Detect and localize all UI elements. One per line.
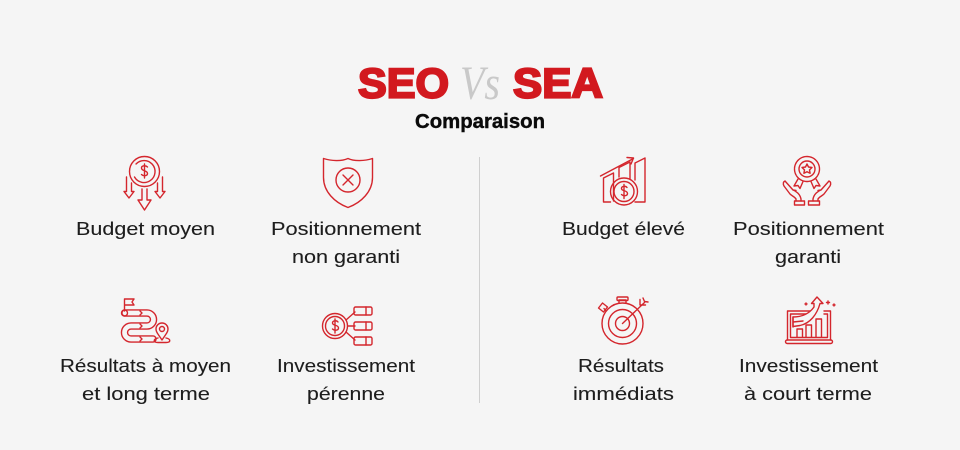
icon: shield with cross — [324, 158, 372, 208]
item: résultats immédiats — [573, 297, 674, 404]
title — [358, 57, 603, 110]
icon: hands with award — [783, 156, 831, 205]
label: Investissement — [277, 355, 415, 376]
item: positionnement non garanti: non garanti — [292, 246, 400, 267]
label: Budget moyen — [76, 218, 215, 239]
item: investissement pérenne — [277, 307, 415, 404]
subtitle: Comparaison — [415, 111, 545, 133]
label: Positionnement — [733, 218, 884, 239]
item: résultats à moyen et long terme — [60, 299, 231, 404]
item: résultats à moyen et long terme: et long terme — [82, 383, 210, 404]
item: positionnement garanti — [733, 156, 884, 267]
label: Investissement — [739, 355, 878, 376]
icon: coin with linked boxes — [322, 307, 372, 345]
icon: winding road with flag and pin — [122, 299, 170, 342]
item: investissement à court terme — [739, 297, 878, 404]
item: budget élevé — [562, 158, 685, 239]
icon: stopwatch with target — [598, 297, 648, 344]
icon: rising bars with coin — [600, 158, 645, 205]
label: Positionnement — [271, 218, 421, 239]
item: investissement à court terme: à court terme — [744, 383, 872, 404]
title: Vs — [460, 57, 500, 110]
icon: coin with down arrows — [124, 156, 165, 210]
panel: SEO — [60, 156, 421, 404]
item: résultats immédiats: immédiats — [573, 383, 674, 404]
item: budget moyen — [76, 156, 215, 239]
icon: laptop with rising arrow — [786, 297, 835, 344]
label: Budget élevé — [562, 218, 685, 239]
title: SEO — [358, 60, 449, 106]
label: Résultats — [578, 355, 664, 376]
item: positionnement non garanti — [271, 158, 421, 267]
item: positionnement garanti: garanti — [775, 246, 841, 267]
title: SEA — [513, 60, 603, 106]
panel: SEA — [562, 156, 884, 404]
label: Résultats à moyen — [60, 355, 231, 376]
item: investissement pérenne: pérenne — [307, 383, 385, 404]
